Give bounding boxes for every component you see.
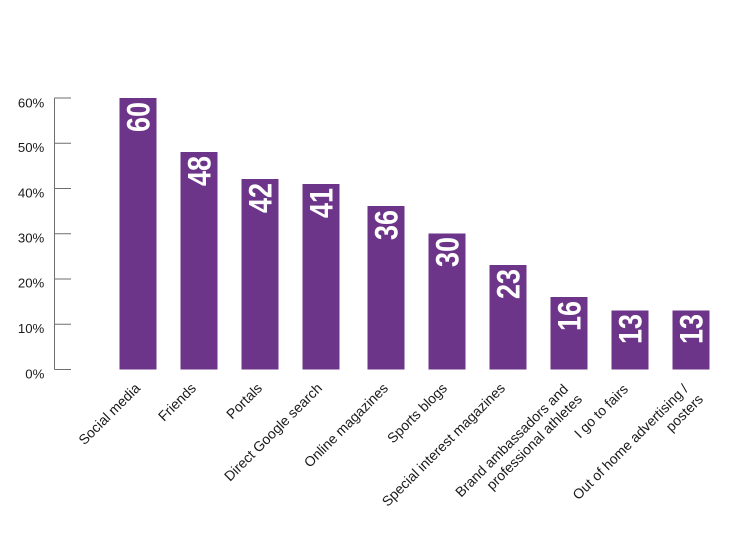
bar: Out of home advertising 13: 13	[674, 314, 710, 344]
category labels: Out of home advertising /	[569, 381, 691, 503]
bar: Brand ambassadors 16: 16	[552, 301, 588, 331]
bar: Friends 48	[180, 152, 218, 370]
category labels: Social media	[75, 380, 143, 448]
y axis labels	[18, 96, 45, 382]
category labels: Friends	[155, 380, 199, 424]
category labels: Brand ambassadors and	[452, 381, 571, 500]
bar: Friends 48: 48	[182, 156, 218, 186]
y axis labels: 10%	[18, 321, 45, 336]
bar: Sports blogs 30	[428, 234, 466, 370]
bar: Out of home advertising 13	[672, 310, 710, 370]
bar: Direct Google search 41	[302, 184, 340, 370]
bar: Brand ambassadors 16	[550, 297, 588, 370]
y axis labels: 0%	[25, 366, 45, 382]
y axis	[54, 98, 71, 370]
category labels: Sports blogs	[384, 380, 450, 446]
category labels: professional athletes	[483, 391, 585, 493]
y axis labels: 20%	[18, 276, 45, 290]
category labels: Portals	[223, 380, 265, 422]
y axis labels: 40%	[18, 186, 45, 200]
bar: I go to fairs 13: 13	[612, 314, 648, 344]
bar: Portals 42: 42	[242, 183, 278, 213]
category labels	[75, 380, 706, 509]
bar: Online magazines 36	[368, 206, 404, 370]
bar: Social media 60	[120, 98, 156, 370]
category labels: posters	[662, 391, 706, 435]
bar: Social media 60: 60	[120, 102, 156, 132]
bar: I go to fairs 13	[612, 310, 648, 370]
bar: Online magazines 36: 36	[368, 210, 404, 240]
y axis labels: 50%	[18, 140, 45, 155]
bar: Portals 42	[242, 179, 278, 370]
y axis labels: 60%	[18, 96, 45, 110]
category labels: Direct Google search	[221, 380, 325, 484]
bar: Special interest magazines 23: 23	[490, 269, 526, 299]
bar: Special interest magazines 23	[490, 265, 526, 370]
bar: Sports blogs 30: 30	[430, 237, 466, 267]
category labels: I go to fairs	[571, 381, 631, 441]
category labels: Online magazines	[301, 380, 391, 470]
bar: Direct Google search 41: 41	[304, 188, 340, 218]
category labels: Special interest magazines	[378, 380, 508, 509]
y axis labels: 30%	[18, 230, 45, 246]
